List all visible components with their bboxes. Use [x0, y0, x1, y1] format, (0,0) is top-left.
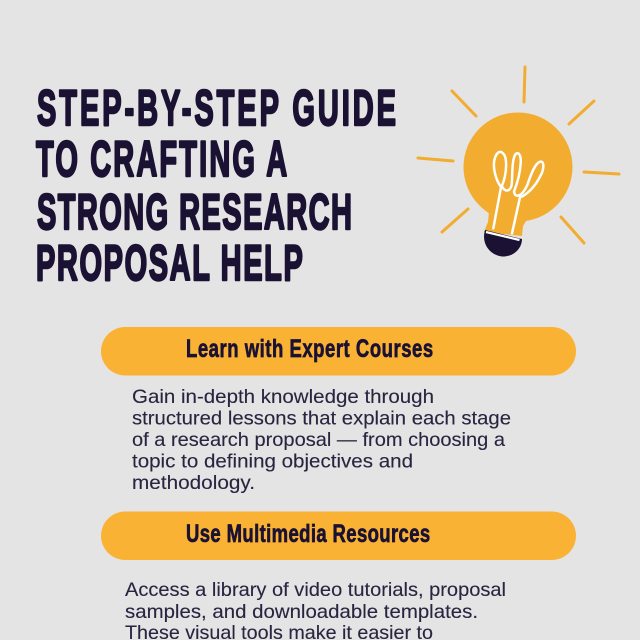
title: [36, 80, 396, 291]
body text: [132, 386, 511, 494]
bulb glass: [464, 112, 572, 236]
body text: topic to defining objectives and: [132, 450, 413, 472]
body text: Gain in-depth knowledge through: [132, 386, 434, 408]
title: TO CRAFTING A: [36, 131, 287, 187]
heading pill: Use Multimedia Resources: [186, 519, 430, 548]
title: STEP-BY-STEP GUIDE: [37, 80, 396, 136]
body text: samples, and downloadable templates.: [125, 601, 478, 623]
body text: [125, 579, 506, 640]
body text: methodology.: [132, 472, 255, 494]
heading pill: [101, 327, 576, 376]
panel: learn with expert courses: [101, 327, 576, 494]
heading pill: Learn with Expert Courses: [186, 334, 433, 363]
heading pill: [101, 512, 576, 560]
light rays: [418, 67, 619, 243]
body text: structured lessons that explain each stage: [132, 408, 511, 430]
panel: use multimedia resources: [101, 512, 576, 640]
body text: of a research proposal — from choosing a: [132, 429, 505, 451]
icon: light bulb: [418, 67, 619, 257]
title: PROPOSAL HELP: [36, 235, 303, 291]
filament: [493, 152, 543, 233]
bulb base: [484, 230, 522, 257]
title: STRONG RESEARCH: [37, 184, 352, 240]
body text: Access a library of video tutorials, proposal: [125, 579, 506, 601]
